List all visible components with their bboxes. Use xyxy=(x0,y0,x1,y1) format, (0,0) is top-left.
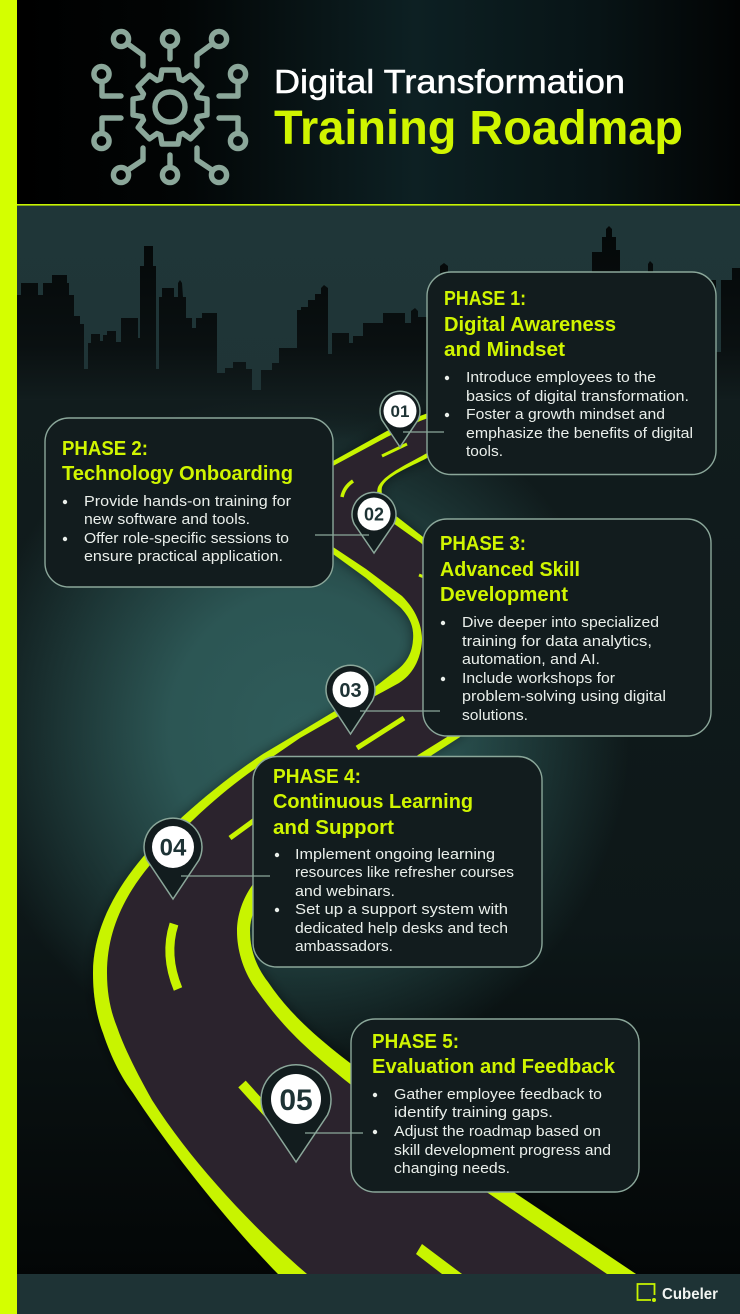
phase 2 heading: Technology Onboarding xyxy=(62,463,293,485)
phase 5 bullets: identify training gaps. xyxy=(394,1104,553,1121)
pin 05: 05 xyxy=(279,1084,313,1117)
phase 1 bullets: basics of digital transformation. xyxy=(466,388,689,405)
header band xyxy=(17,0,740,206)
phase 1 bullets: emphasize the benefits of digital xyxy=(466,425,693,442)
logo: Cubeler: Cubeler xyxy=(662,1286,718,1303)
phase 3 bullets: problem-solving using digital xyxy=(462,688,666,705)
phase 5 bullets xyxy=(373,1086,611,1177)
phase 1 bullets: Foster a growth mindset and xyxy=(466,406,665,423)
phase 4 bullets: Implement ongoing learning xyxy=(295,846,495,863)
phase 2 bullets: ensure practical application. xyxy=(84,548,283,565)
panel: phase 3 xyxy=(423,519,711,736)
phase 4 heading xyxy=(273,766,473,839)
panel: phase 2 xyxy=(45,418,333,587)
phase 3 heading xyxy=(440,533,580,606)
phase 3 heading: Advanced Skill xyxy=(440,559,580,581)
phase 5 bullets: Gather employee feedback to xyxy=(394,1086,602,1103)
phase 1 heading: PHASE 1: xyxy=(444,288,526,310)
phase 4 bullets: and webinars. xyxy=(295,883,395,900)
pin 05 xyxy=(261,1065,331,1162)
phase 1 bullets: tools. xyxy=(466,443,503,460)
road with lime edge lines xyxy=(93,405,636,1274)
pin 01 xyxy=(380,391,420,447)
phase 2 bullets: Offer role-specific sessions to xyxy=(84,530,289,547)
title: Digital Transformation xyxy=(274,63,625,100)
pin 03 xyxy=(326,665,375,734)
phase 3 heading: Development xyxy=(440,584,568,606)
phase 4 bullets: resources like refresher courses xyxy=(295,864,514,881)
phase 5 bullets: changing needs. xyxy=(394,1160,510,1177)
title: Training Roadmap xyxy=(274,102,683,155)
phase 1 heading xyxy=(444,288,616,361)
panel: phase 5 xyxy=(351,1019,639,1192)
panel: phase 4 xyxy=(253,756,542,967)
pin 02 xyxy=(352,492,396,553)
phase 2 bullets: new software and tools. xyxy=(84,511,250,528)
phase 3 heading: PHASE 3: xyxy=(440,533,526,555)
footer band xyxy=(17,1274,740,1314)
phase 5 heading xyxy=(372,1031,616,1078)
phase 4 heading: Continuous Learning xyxy=(273,791,473,813)
phase 3 bullets: solutions. xyxy=(462,707,528,724)
phase 1 heading: and Mindset xyxy=(444,339,565,361)
pin 04 xyxy=(144,818,202,899)
phase 4 bullets: Set up a support system with xyxy=(295,901,508,918)
icon: gear with circuit nodes xyxy=(94,31,246,183)
phase 4 bullets xyxy=(275,846,514,955)
pin 04: 04 xyxy=(160,834,187,862)
city skyline silhouette xyxy=(17,226,740,440)
phase 2 bullets: Provide hands-on training for xyxy=(84,493,291,510)
phase 4 heading: and Support xyxy=(273,817,394,839)
phase 3 bullets: Dive deeper into specialized xyxy=(462,614,659,631)
pin 02: 02 xyxy=(364,504,384,524)
connector lines from pins to panels xyxy=(181,432,444,1133)
pin 03: 03 xyxy=(339,680,362,702)
phase 3 bullets: training for data analytics, xyxy=(462,633,652,650)
left lime bar xyxy=(0,0,17,1314)
phase 1 bullets xyxy=(445,369,693,460)
road centre dashes xyxy=(170,444,462,1274)
phase 2 heading xyxy=(62,438,293,485)
phase 1 heading: Digital Awareness xyxy=(444,314,616,336)
phase 4 bullets: ambassadors. xyxy=(295,938,393,955)
phase 3 bullets: automation, and AI. xyxy=(462,651,600,668)
phase 3 bullets: Include workshops for xyxy=(462,670,615,687)
pin 01: 01 xyxy=(391,402,409,421)
phase 5 heading: Evaluation and Feedback xyxy=(372,1056,616,1078)
logo: Cubeler xyxy=(638,1284,718,1303)
phase 4 heading: PHASE 4: xyxy=(273,766,361,788)
phase 2 heading: PHASE 2: xyxy=(62,438,148,460)
phase 5 bullets: skill development progress and xyxy=(394,1142,611,1159)
phase 1 bullets: Introduce employees to the xyxy=(466,369,656,386)
phase 5 bullets: Adjust the roadmap based on xyxy=(394,1123,601,1140)
panel: phase 1 xyxy=(427,272,716,474)
phase 4 bullets: dedicated help desks and tech xyxy=(295,920,508,937)
phase 2 bullets xyxy=(63,493,291,565)
phase 5 heading: PHASE 5: xyxy=(372,1031,459,1053)
background: sky and lower scene xyxy=(17,205,740,1280)
phase 3 bullets xyxy=(441,614,666,724)
title xyxy=(274,63,683,155)
